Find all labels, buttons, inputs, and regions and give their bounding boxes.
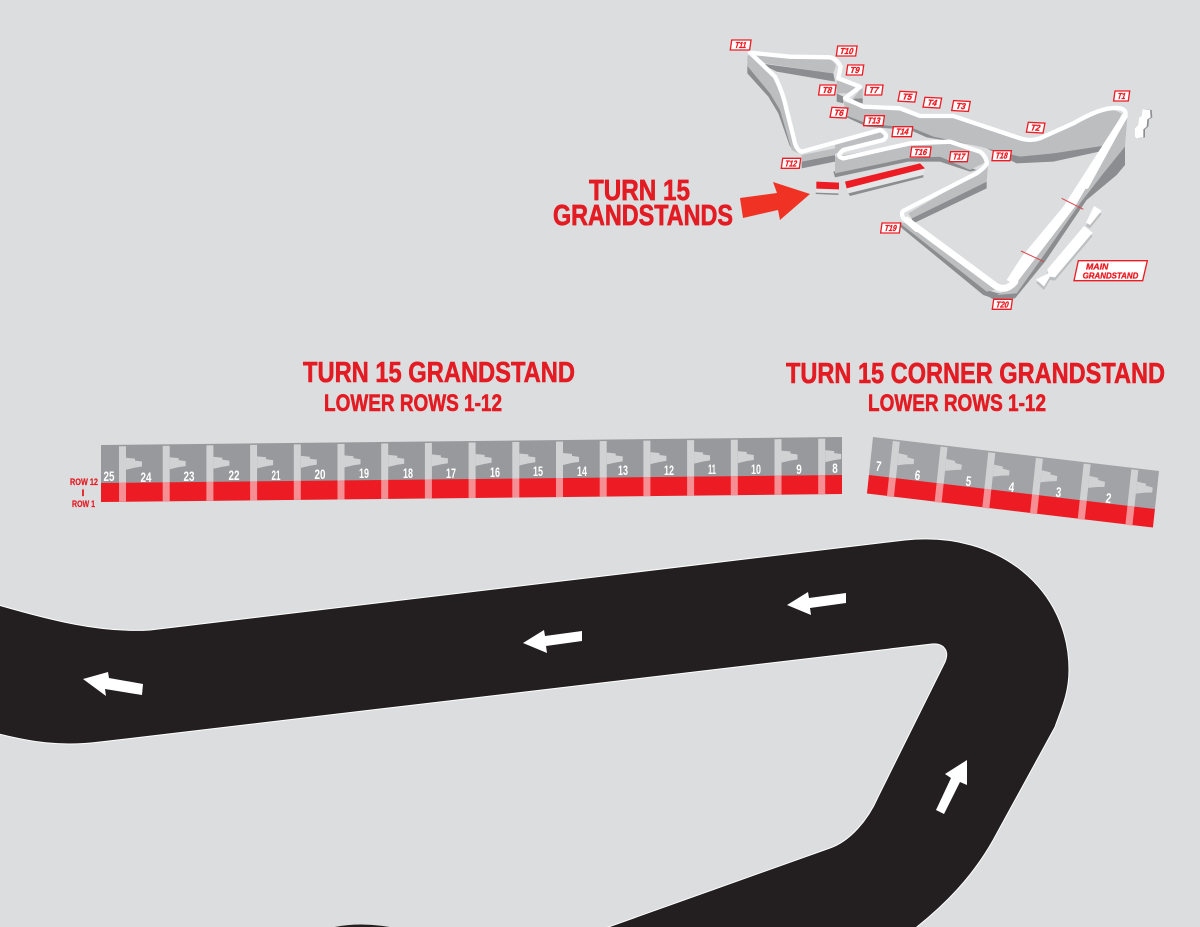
section numbers 25 to 8: 16 bbox=[490, 464, 500, 480]
turn labels bbox=[730, 40, 1130, 309]
section numbers 25 to 8: 15 bbox=[533, 463, 543, 479]
arrow: track direction centre bbox=[523, 630, 582, 653]
section numbers 25 to 8: 20 bbox=[314, 466, 326, 482]
section numbers 7 to 2: 5 bbox=[965, 473, 972, 489]
turn labels: T7 bbox=[869, 85, 880, 95]
section numbers 25 to 8: 17 bbox=[446, 465, 456, 481]
heading: turn 15 corner grandstand: LOWER ROWS 1-12 bbox=[868, 390, 1046, 417]
circuit relief shading bbox=[747, 53, 1127, 299]
callout: turn 15 grandstands bbox=[553, 175, 733, 232]
row labels: I bbox=[82, 488, 84, 498]
section numbers 25 to 8: 12 bbox=[664, 462, 674, 478]
section numbers 7 to 2: 2 bbox=[1105, 490, 1112, 506]
sector lines bbox=[1021, 198, 1083, 262]
turn labels: T16 bbox=[914, 147, 928, 157]
section numbers 25 to 8: 21 bbox=[272, 467, 281, 483]
race track close-up bbox=[0, 539, 1069, 927]
row labels: ROW 1 bbox=[72, 499, 95, 509]
row labels: ROW 12 bbox=[70, 477, 98, 487]
turn labels: T17 bbox=[952, 152, 967, 162]
section numbers 25 to 8: 11 bbox=[708, 461, 716, 477]
turn labels: T8 bbox=[822, 85, 833, 95]
section numbers 7 to 2: 3 bbox=[1055, 484, 1062, 500]
heading: turn 15 corner grandstand bbox=[786, 358, 1165, 417]
section numbers 7 to 2 bbox=[875, 458, 1112, 506]
seating chart: turn 15 grandstand bbox=[101, 437, 842, 502]
section numbers 25 to 8: 22 bbox=[228, 467, 240, 483]
label: main grandstand bbox=[1074, 261, 1147, 281]
turn labels: T1 bbox=[1117, 91, 1126, 101]
section numbers 25 to 8: 23 bbox=[184, 468, 195, 484]
label: main grandstand: MAIN bbox=[1086, 261, 1109, 271]
turn labels: T13 bbox=[867, 116, 881, 126]
circuit racing line bbox=[750, 53, 1128, 288]
turn labels: T2 bbox=[1030, 123, 1041, 133]
callout: turn 15 grandstands: TURN 15 bbox=[589, 175, 690, 207]
arrow: track direction up bbox=[936, 760, 967, 814]
section numbers 25 to 8: 14 bbox=[577, 463, 587, 479]
turn labels: T6 bbox=[833, 108, 845, 118]
section numbers 7 to 2: 7 bbox=[875, 458, 882, 474]
turn labels: T3 bbox=[955, 101, 967, 111]
turn labels: T19 bbox=[884, 223, 897, 233]
seating chart: turn 15 corner grandstand bbox=[867, 437, 1159, 528]
turn labels: T11 bbox=[734, 40, 747, 50]
turn labels: T12 bbox=[784, 158, 798, 168]
section numbers 25 to 8: 18 bbox=[403, 465, 413, 481]
turn labels: T4 bbox=[927, 98, 938, 108]
icon: turn 1 stand bbox=[1135, 109, 1152, 138]
turn labels: T9 bbox=[850, 65, 861, 75]
section numbers 25 to 8 bbox=[104, 460, 838, 485]
section numbers 25 to 8: 25 bbox=[104, 468, 115, 484]
section numbers 25 to 8: 10 bbox=[751, 461, 761, 477]
section numbers 25 to 8: 9 bbox=[796, 461, 802, 477]
section numbers 25 to 8: 19 bbox=[359, 465, 369, 481]
row labels bbox=[70, 477, 98, 509]
label: main grandstand: GRANDSTAND bbox=[1083, 270, 1138, 280]
arrow: pointer to grandstands bbox=[740, 182, 810, 220]
turn labels: T14 bbox=[895, 127, 909, 137]
turn labels: T10 bbox=[839, 46, 854, 56]
heading: turn 15 grandstand: LOWER ROWS 1-12 bbox=[324, 390, 502, 417]
arrow: track direction upper right bbox=[787, 592, 846, 615]
turn labels: T18 bbox=[995, 151, 1008, 161]
turn labels: T20 bbox=[995, 299, 1009, 309]
heading: turn 15 grandstand bbox=[303, 357, 575, 417]
icon: turn 15 grandstand markers bbox=[816, 163, 925, 196]
turn labels: T5 bbox=[902, 92, 913, 102]
arrow: track direction far left bbox=[83, 672, 143, 696]
icon: main grandstand block bbox=[1036, 206, 1102, 290]
section numbers 25 to 8: 24 bbox=[140, 469, 152, 485]
heading: turn 15 grandstand: TURN 15 GRANDSTAND bbox=[303, 357, 575, 389]
section numbers 7 to 2: 4 bbox=[1008, 479, 1015, 495]
circuit overview map bbox=[730, 40, 1152, 309]
callout: turn 15 grandstands: GRANDSTANDS bbox=[553, 200, 733, 232]
section numbers 25 to 8: 8 bbox=[832, 460, 838, 476]
section numbers 7 to 2: 6 bbox=[914, 467, 921, 483]
section numbers 25 to 8: 13 bbox=[618, 462, 628, 478]
